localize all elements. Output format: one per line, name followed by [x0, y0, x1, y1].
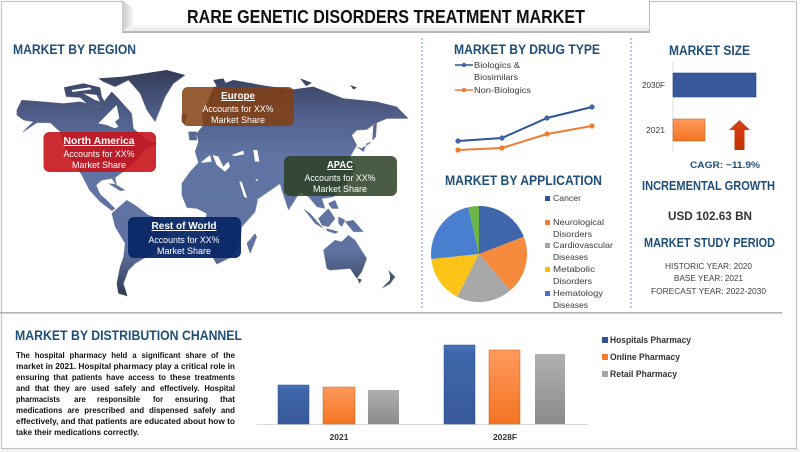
text block: distribution description: ensuring that patients have access to these treatments	[16, 372, 235, 382]
callout: North America: Accounts for XX%	[64, 149, 134, 159]
world map	[17, 70, 408, 296]
text block: distribution description: are	[74, 394, 86, 404]
callout: North America: Market Share	[72, 160, 126, 170]
text block: distribution description: medications are prescribed and dispensed safely and	[16, 405, 235, 415]
legend: application: Disorders	[553, 276, 592, 286]
bar chart: distribution channel: 2021	[330, 432, 349, 442]
bar chart: market size: 2021	[646, 125, 665, 135]
text block: distribution description: and that they are used safely and effectively. Hospital	[16, 383, 235, 393]
callout: APAC: Accounts for XX%	[304, 173, 376, 183]
legend: application: Hematology	[553, 288, 604, 298]
text block: distribution description: responsible	[97, 394, 140, 404]
callout: Rest of World: Market Share	[157, 246, 211, 256]
text block: distribution description: market in 2021. Hospital pharmacy play a critical role in	[16, 361, 235, 371]
callout: Europe: Europe	[221, 91, 255, 102]
study period details: HISTORIC YEAR: 2020	[665, 261, 752, 271]
callout: North America	[44, 132, 156, 172]
heading: incremental growth: INCREMENTAL GROWTH	[642, 178, 775, 193]
bar chart: distribution channel: 2028F	[493, 432, 517, 442]
legend: application: Neurological	[553, 217, 604, 227]
legend: drug type: Biologics &	[474, 60, 520, 70]
text block: distribution description	[16, 350, 235, 437]
heading: market by drug type: MARKET BY DRUG TYPE	[454, 42, 600, 57]
callout: Rest of World: Accounts for XX%	[148, 235, 220, 245]
text block: distribution description: that	[220, 394, 235, 404]
value: incremental growth: USD 102.63 BN	[668, 209, 752, 223]
panel: market size	[642, 43, 775, 296]
text block: distribution description: The hospital pharmacy held a significant share of the	[16, 350, 235, 360]
callout: Rest of World: Rest of World	[152, 221, 216, 232]
legend: distribution channel: Hospitals Pharmacy	[610, 335, 691, 345]
icon: growth arrow	[729, 120, 750, 150]
legend: application: Diseases	[553, 300, 588, 310]
study period details: BASE YEAR: 2021	[674, 273, 743, 283]
heading: distribution channel: MARKET BY DISTRIBUTION CHANNEL	[15, 328, 242, 343]
bar chart: market size: 2030F	[642, 80, 665, 90]
callout: APAC: APAC	[327, 160, 353, 171]
callout: APAC: Market Share	[313, 184, 367, 194]
legend: application: Cancer	[553, 193, 581, 203]
text block: distribution description: take their medications correctly.	[16, 427, 139, 437]
panel: market by application	[431, 173, 613, 310]
CAGR label: CAGR: ~11.9%	[690, 160, 761, 171]
callout: Europe	[182, 87, 294, 126]
bar chart: market size	[642, 62, 756, 152]
panel: market by distribution channel	[15, 328, 691, 442]
callout: Europe: Accounts for XX%	[202, 104, 274, 114]
text block: distribution description: effectively, and that patients are educated about how to	[16, 416, 235, 426]
panel: market by region	[13, 42, 408, 296]
text block: distribution description: pharmacists	[16, 394, 60, 404]
legend: distribution channel	[602, 335, 691, 379]
legend: application	[545, 193, 613, 310]
bar chart: distribution channel	[257, 345, 588, 442]
line chart: drug type trends	[455, 104, 595, 153]
heading: market study period: MARKET STUDY PERIOD	[644, 235, 775, 250]
legend: application: Diseases	[553, 252, 588, 262]
legend: distribution channel: Retail Pharmacy	[610, 369, 677, 379]
heading: market size: MARKET SIZE	[669, 43, 750, 58]
legend: drug type: Non-Biologics	[474, 85, 531, 95]
title banner	[122, 0, 650, 33]
legend: application: Metabolic	[553, 264, 596, 274]
callout: Rest of World	[128, 217, 241, 258]
pie chart: application share	[431, 206, 527, 302]
callout: APAC	[284, 156, 397, 196]
legend: drug type	[455, 60, 531, 95]
text block: distribution description: for	[153, 394, 164, 404]
legend: drug type: Biosimilars	[474, 72, 518, 82]
heading: market by region: MARKET BY REGION	[13, 42, 136, 57]
heading: market by application: MARKET BY APPLICATION	[445, 173, 602, 188]
study period details	[651, 261, 766, 296]
legend: application: Disorders	[553, 229, 592, 239]
panel: market by drug type	[454, 42, 600, 153]
callout: North America: North America	[64, 136, 135, 147]
legend: application: Cardiovascular	[553, 240, 613, 250]
legend: distribution channel: Online Pharmacy	[610, 352, 680, 362]
text block: distribution description: ensuring	[175, 394, 208, 404]
title banner: RARE GENETIC DISORDERS TREATMENT MARKET	[187, 7, 585, 27]
callout: Europe: Market Share	[211, 115, 265, 125]
study period details: FORECAST YEAR: 2022-2030	[651, 286, 766, 296]
